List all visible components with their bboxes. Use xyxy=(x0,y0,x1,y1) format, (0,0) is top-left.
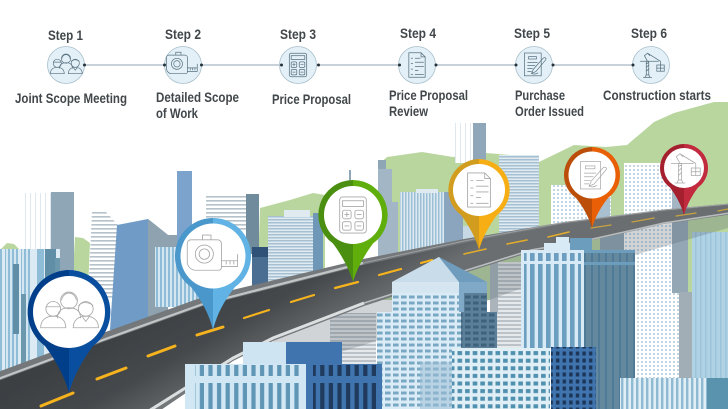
hills xyxy=(0,102,728,300)
step 5 header: Step 5 xyxy=(514,25,550,41)
map pin 5 xyxy=(564,147,620,228)
building: peaked tower xyxy=(377,257,497,409)
step 2 header: of Work xyxy=(156,105,198,121)
step 4 header: Step 4 xyxy=(400,25,436,41)
map pin 2 xyxy=(175,218,251,330)
step 1 header: Joint Scope Meeting xyxy=(15,90,127,106)
step 1 header: Step 1 xyxy=(48,27,83,43)
step 4 header xyxy=(389,25,468,119)
building: central tower xyxy=(521,237,635,409)
timeline connector xyxy=(84,64,650,66)
building: bottom right block xyxy=(620,378,728,409)
map pin 4 xyxy=(448,159,510,250)
foreground buildings xyxy=(185,237,728,409)
map pin 6 xyxy=(660,144,708,215)
road centre dashes xyxy=(41,209,728,406)
step 5 header: Order Issued xyxy=(515,103,584,119)
map pin 3 xyxy=(318,180,388,282)
step 2 header: Detailed Scope xyxy=(156,89,239,105)
step 5 header: Purchase xyxy=(515,87,565,103)
step 3 header: Step 3 xyxy=(280,26,316,42)
step 6 header xyxy=(603,25,711,103)
road shadow xyxy=(273,212,728,372)
step 2 header: Step 2 xyxy=(165,26,201,42)
road xyxy=(0,204,728,409)
background skyline xyxy=(0,123,688,384)
building: low windowed block xyxy=(452,347,596,409)
step 1 header xyxy=(15,27,127,106)
step 4 header: Review xyxy=(389,103,428,119)
step 4 header: Price Proposal xyxy=(389,87,468,103)
map pin 1 xyxy=(28,270,110,393)
building: bottom left block xyxy=(185,342,382,409)
lower skyline behind the road xyxy=(330,215,728,382)
step 2 header xyxy=(156,26,239,121)
step 5 header xyxy=(514,25,584,119)
step 3 header: Price Proposal xyxy=(272,91,351,107)
step 6 header: Step 6 xyxy=(631,25,667,41)
step 3 header xyxy=(272,26,351,107)
